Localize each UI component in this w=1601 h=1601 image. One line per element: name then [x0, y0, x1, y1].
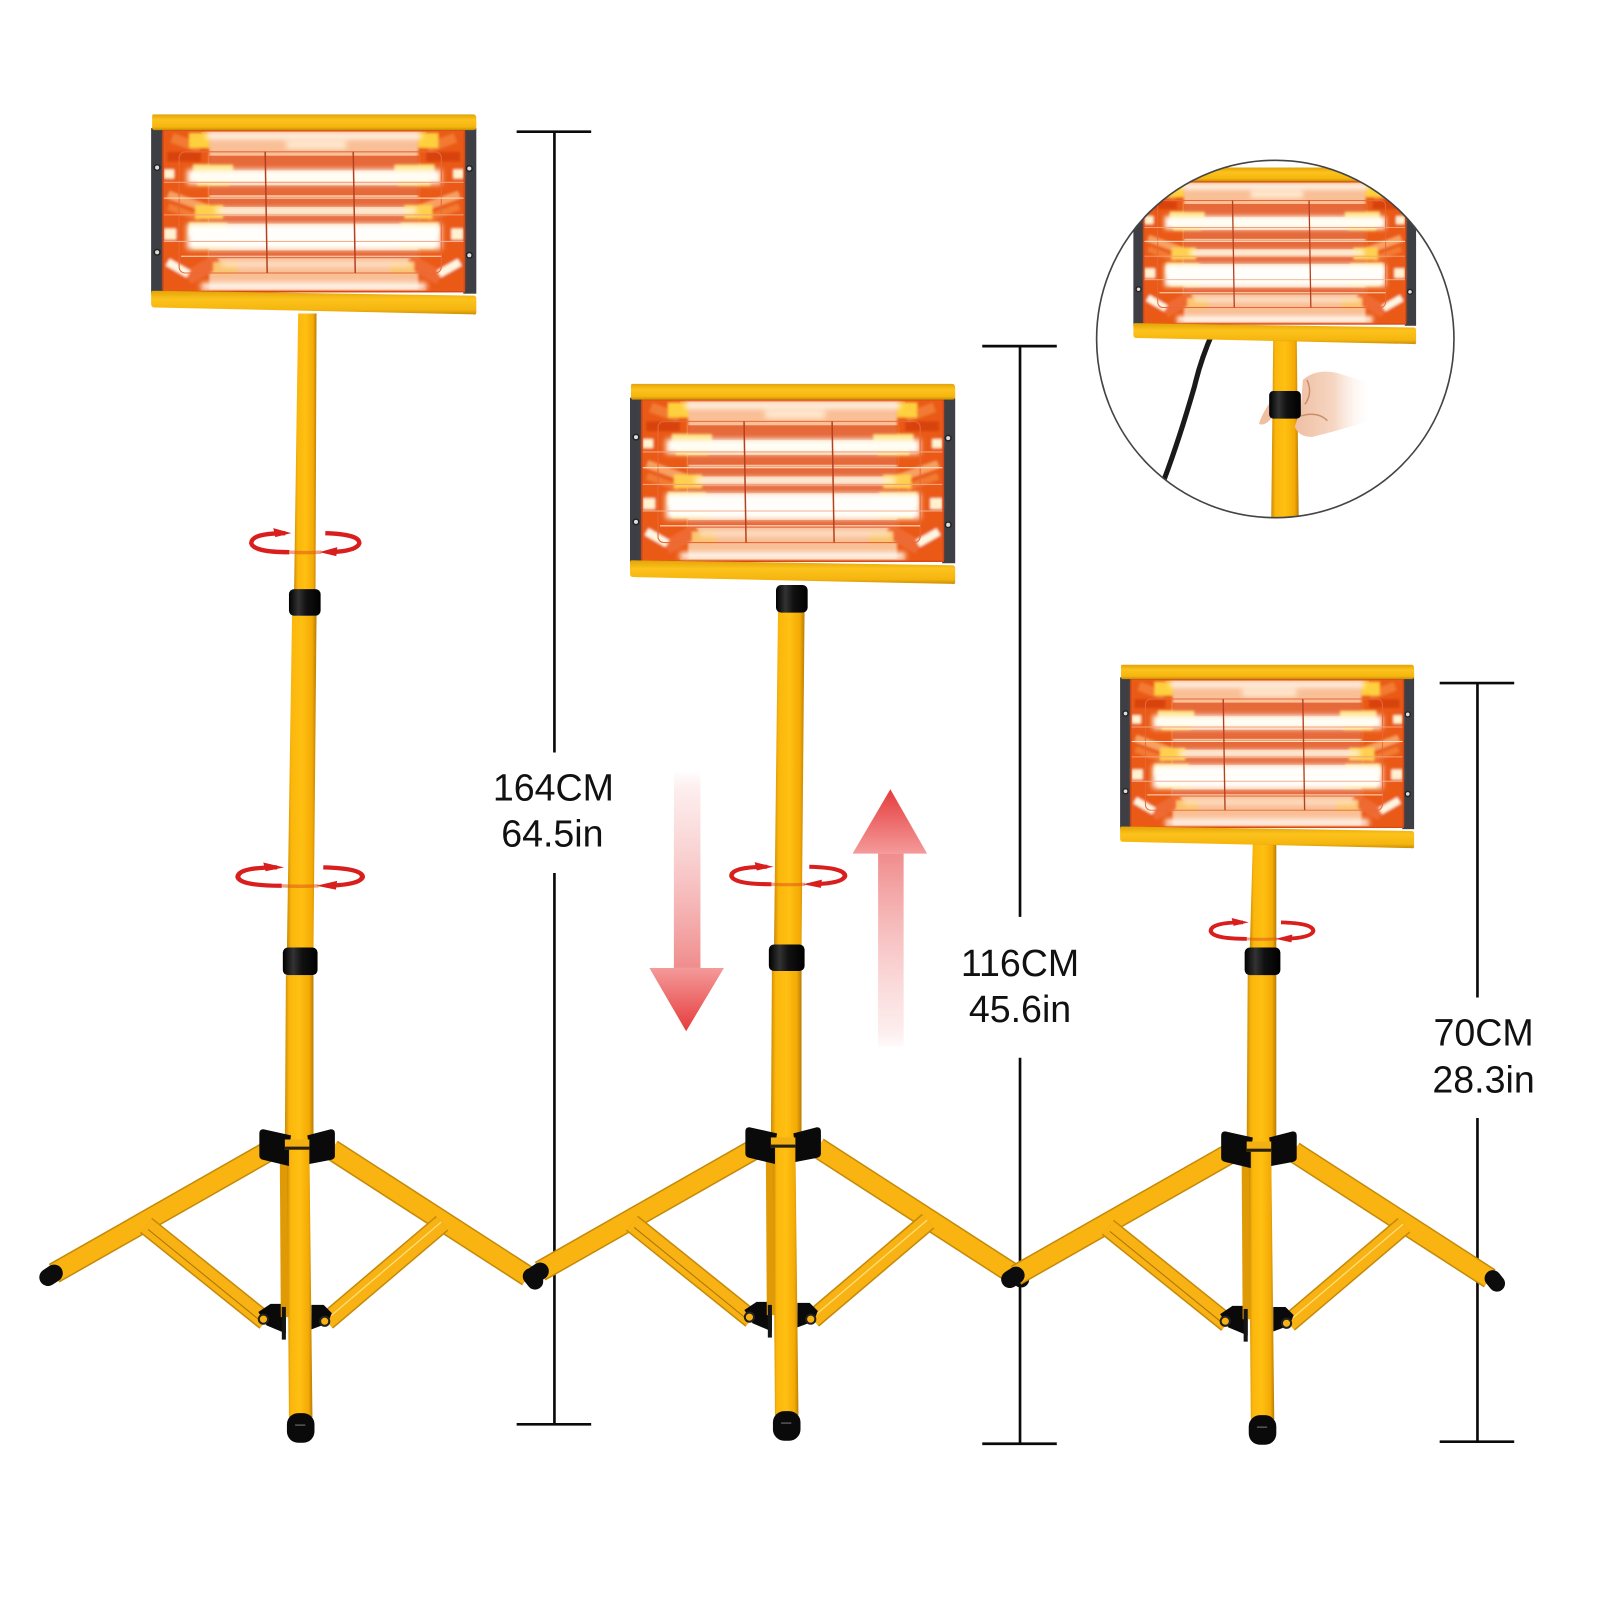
- rotation arrow: shortest stand: [1211, 918, 1313, 942]
- inset circle: height adjustment detail: [1097, 160, 1454, 521]
- label: 164CM 64.5in: 164CM: [493, 766, 614, 808]
- tripod stand: tallest: [48, 313, 535, 1443]
- dimension: 116CM: [961, 346, 1079, 1444]
- label: 164CM 64.5in: 64.5in: [501, 812, 604, 854]
- label: 116CM 45.6in: [961, 942, 1079, 1030]
- inset collar: [1269, 391, 1301, 419]
- heater: shortest: [1120, 665, 1414, 848]
- arrow: up: [853, 789, 927, 1050]
- circle outline: [1097, 160, 1454, 518]
- arrow: down: [649, 771, 724, 1031]
- heater: tallest: [151, 114, 476, 315]
- inset heater: [1133, 167, 1416, 344]
- label: 164CM 64.5in: [493, 766, 614, 854]
- label: 116CM 45.6in: 45.6in: [969, 988, 1071, 1030]
- label: 116CM 45.6in: 116CM: [961, 942, 1079, 984]
- label: 70CM 28.3in: [1432, 1012, 1535, 1101]
- power cable: [1164, 332, 1213, 480]
- dimension: 70CM: [1432, 683, 1535, 1442]
- tripod stand: middle: [534, 585, 1021, 1441]
- rotation arrow: middle stand: [731, 862, 845, 888]
- tripod stand: shortest: [1010, 843, 1497, 1445]
- inset pole: [1271, 337, 1299, 521]
- label: 70CM 28.3in: 70CM: [1433, 1012, 1534, 1054]
- label: 70CM 28.3in: 28.3in: [1432, 1059, 1535, 1101]
- rotation arrow: upper: [251, 528, 359, 556]
- hand: [1259, 372, 1359, 437]
- rotation arrow: lower: [238, 862, 362, 890]
- heater: middle: [630, 384, 955, 584]
- dimension: 164CM: [493, 132, 614, 1424]
